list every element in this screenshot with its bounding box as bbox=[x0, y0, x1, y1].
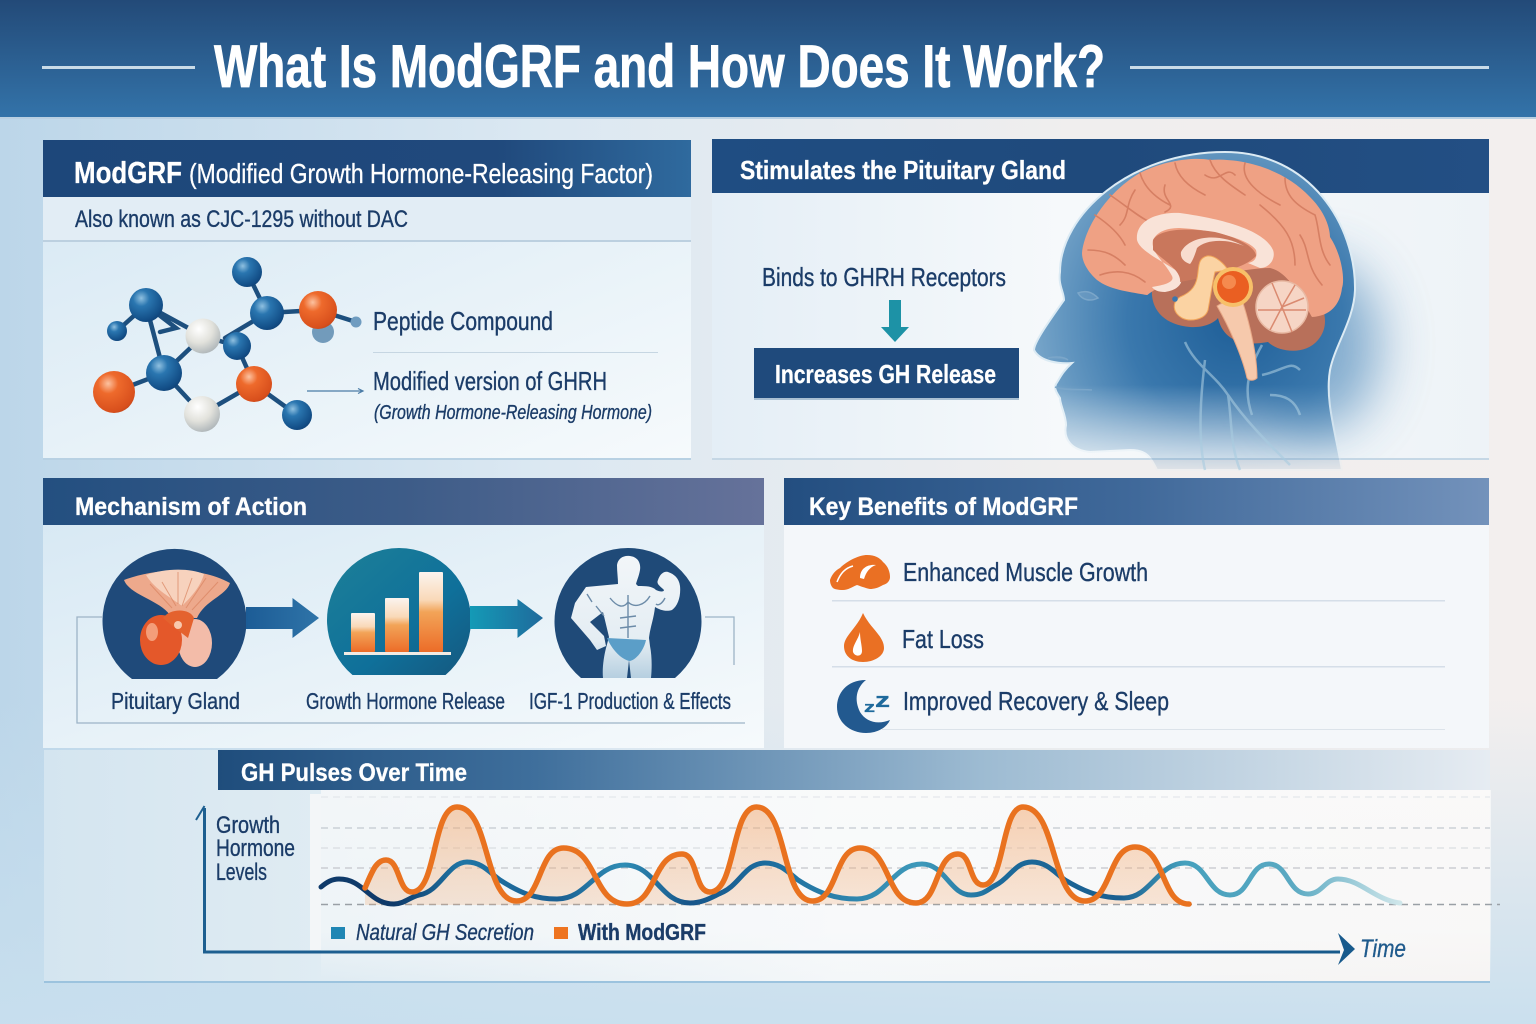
legend: Natural GH Secretion bbox=[356, 919, 534, 945]
benefit: fat loss: Fat Loss bbox=[902, 624, 984, 654]
panel header bbox=[784, 478, 1489, 525]
y axis label: Levels bbox=[216, 859, 267, 886]
pointer line to gland bbox=[760, 296, 1178, 302]
legend: With ModGRF bbox=[578, 919, 706, 945]
benefit: recovery and sleep: z bbox=[864, 699, 875, 716]
x axis label: Time bbox=[1360, 935, 1406, 963]
icon: molecule bbox=[93, 257, 362, 432]
icon: pituitary gland bbox=[102, 549, 246, 679]
benefit: muscle growth bbox=[830, 555, 1445, 602]
arrow: to modified version bbox=[307, 388, 363, 394]
panel header: Mechanism of Action bbox=[75, 493, 307, 521]
benefit: muscle growth: Enhanced Muscle Growth bbox=[903, 557, 1148, 587]
panel: mechanism of action bbox=[43, 478, 764, 748]
panel: GH pulses chart bbox=[44, 750, 1500, 983]
alias row: Also known as CJC-1295 without DAC bbox=[75, 206, 408, 233]
hypothalamus ball bbox=[1213, 267, 1253, 307]
panel header: (Modified Growth Hormone-Releasing Factor) bbox=[189, 158, 653, 189]
title banner: What Is ModGRF and How Does It Work? bbox=[214, 33, 1105, 100]
label: IGF-1 production and effects: IGF-1 Production & Effects bbox=[529, 688, 731, 714]
gyri folds bbox=[1088, 160, 1330, 285]
pituitary stalk and drop bbox=[1174, 256, 1228, 320]
panel header bbox=[43, 478, 764, 525]
icon: rising bar chart bbox=[327, 548, 471, 675]
brain lower (brown) bbox=[1152, 230, 1325, 351]
chart header: GH Pulses Over Time bbox=[241, 759, 467, 787]
cerebellum bbox=[1256, 281, 1308, 333]
alias row bbox=[43, 197, 691, 242]
label: peptide compound: Peptide Compound bbox=[373, 306, 553, 336]
label: GHRH expansion: (Growth Hormone-Releasing Hormone) bbox=[374, 402, 652, 424]
panel header: ModGRF bbox=[74, 155, 182, 190]
label: growth hormone release: Growth Hormone Release bbox=[306, 688, 505, 714]
brainstem bbox=[1217, 302, 1257, 380]
ModGRF curve bbox=[365, 807, 1189, 904]
icon: flexed muscle bbox=[830, 555, 890, 590]
benefit: recovery and sleep: Improved Recovery & Sleep bbox=[903, 686, 1169, 716]
icon: drop bbox=[844, 613, 884, 662]
y axis label: Growth bbox=[216, 812, 280, 839]
face details bbox=[1048, 292, 1098, 390]
panel: key benefits bbox=[784, 478, 1489, 748]
panel header: Key Benefits of ModGRF bbox=[809, 493, 1078, 521]
axes bbox=[196, 806, 1355, 965]
panel: stimulates the pituitary gland bbox=[712, 139, 1489, 470]
y axis label: Hormone bbox=[216, 835, 295, 862]
legend bbox=[331, 919, 706, 945]
inner region bbox=[1153, 230, 1256, 282]
cerebrum bbox=[1082, 159, 1343, 317]
title banner bbox=[0, 0, 1536, 119]
neck vessels bbox=[1185, 342, 1300, 470]
modGRF area fill bbox=[365, 807, 1189, 905]
panel header: Stimulates the Pituitary Gland bbox=[740, 155, 1066, 185]
icon: moon and zzz bbox=[837, 680, 890, 733]
icon: muscular figure bbox=[554, 548, 702, 678]
label: binds to receptors: Binds to GHRH Receptors bbox=[762, 262, 1006, 292]
benefit: recovery and sleep bbox=[837, 680, 1445, 733]
corpus callosum bbox=[1137, 213, 1274, 292]
panel: ModGRF definition bbox=[43, 140, 691, 460]
callout: increases GH release bbox=[754, 348, 1019, 400]
benefit: fat loss bbox=[832, 613, 1445, 668]
illustration: head and brain bbox=[1034, 152, 1380, 470]
arrow: down to GH release bbox=[881, 300, 909, 342]
head silhouette bbox=[1034, 152, 1355, 470]
natural GH curve bbox=[321, 862, 1400, 904]
arrow: to IGF-1 effects bbox=[470, 599, 543, 638]
benefit: recovery and sleep: z bbox=[875, 690, 890, 712]
panel header bbox=[43, 140, 691, 197]
callout: increases GH release: Increases GH Release bbox=[775, 359, 996, 389]
label: pituitary gland: Pituitary Gland bbox=[111, 688, 240, 714]
chart header bbox=[218, 750, 1490, 790]
panel header bbox=[712, 139, 1489, 193]
arrow: to growth hormone release bbox=[246, 598, 319, 638]
fornix arc bbox=[1181, 238, 1244, 264]
y axis label bbox=[216, 812, 295, 886]
label: modified version: Modified version of GHRH bbox=[373, 366, 607, 396]
